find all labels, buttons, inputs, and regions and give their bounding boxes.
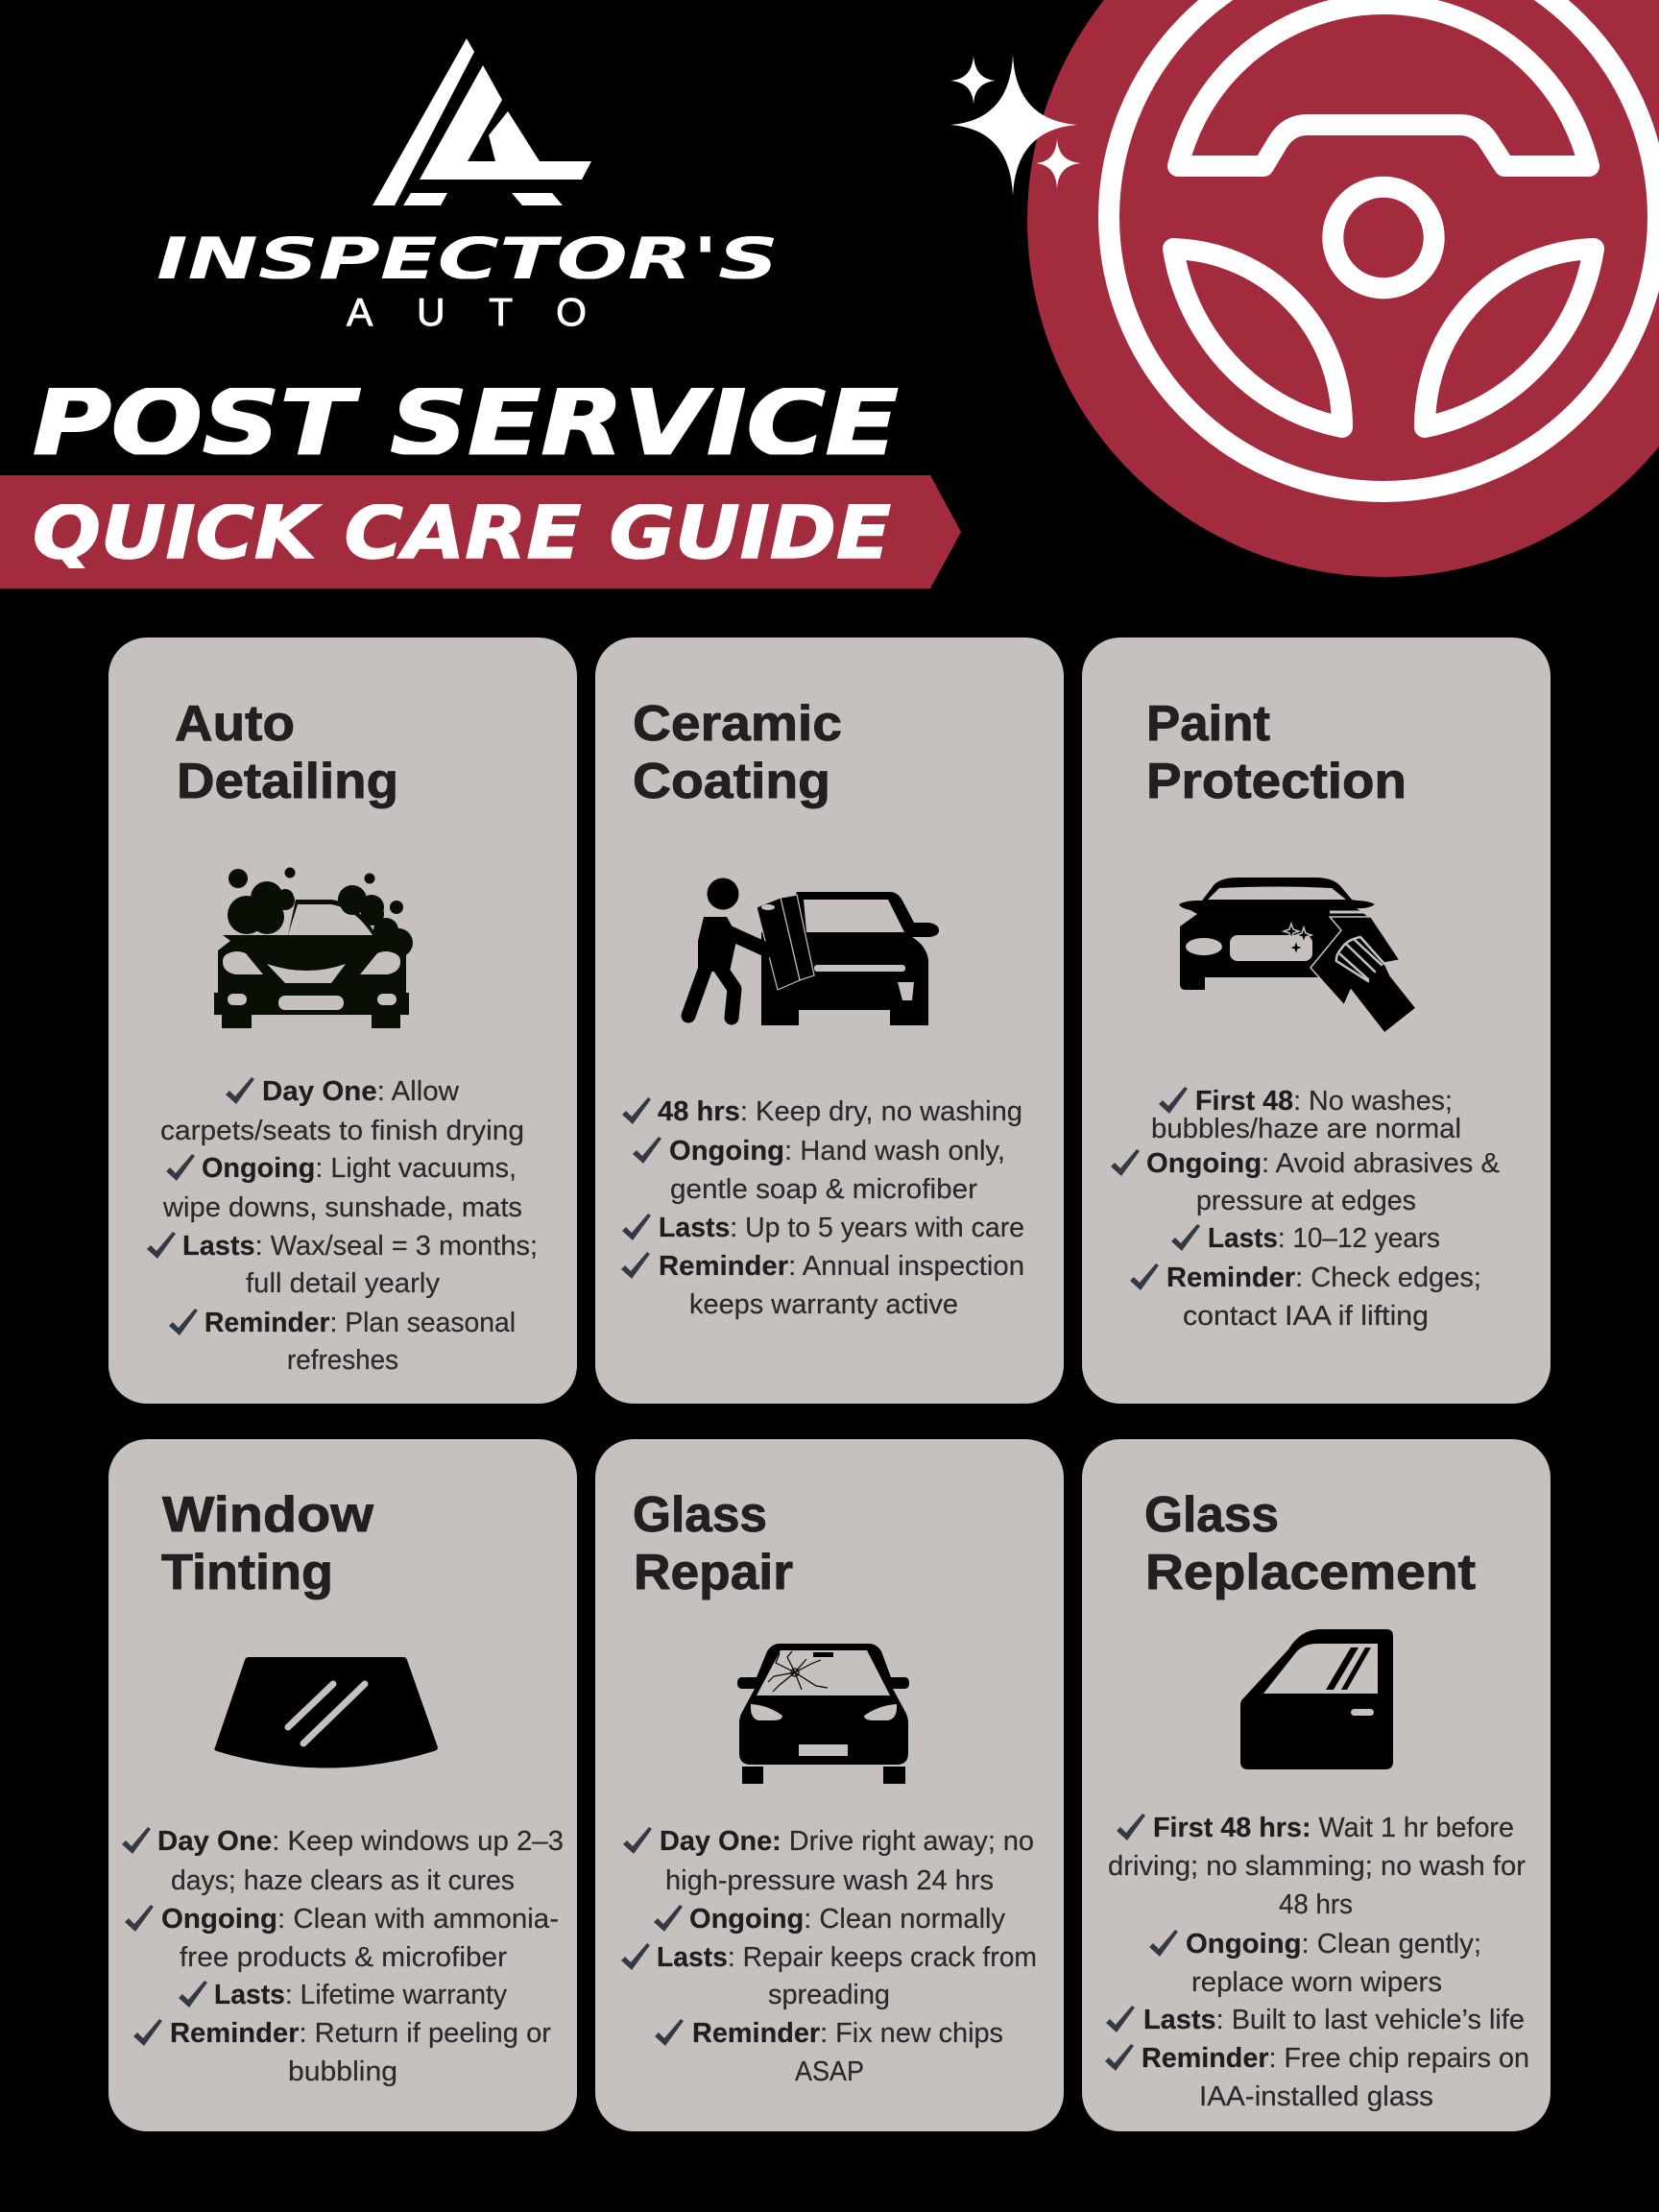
- care list: Lasts: 10–12 years: [1208, 1223, 1440, 1254]
- panel: Glass Replacement: [1082, 1439, 1551, 2131]
- heading: Auto Detailing: [175, 696, 398, 809]
- heading: Window Tinting: Window: [162, 1487, 374, 1543]
- care list: [1105, 1813, 1529, 2112]
- icon: car wash with foam: [214, 868, 413, 1028]
- care list: driving; no slamming; no wash for: [1108, 1851, 1526, 1882]
- heading: Ceramic Coating: Ceramic: [633, 696, 842, 752]
- title: Post Service: POST SERVICE: [33, 371, 899, 476]
- heading: Glass Replacement: Glass: [1144, 1487, 1279, 1543]
- care list: free products & microfiber: [180, 1942, 507, 1973]
- logo mark: [373, 38, 591, 205]
- heading: Ceramic Coating: Coating: [633, 754, 830, 809]
- care list: Ongoing: Clean normally: [689, 1904, 1005, 1935]
- care list: Reminder: Free chip repairs on: [1142, 2043, 1529, 2074]
- care list: Day One: Keep windows up 2–3: [157, 1826, 564, 1857]
- care list: carpets/seats to finish drying: [160, 1116, 524, 1146]
- heading: Window Tinting: [161, 1487, 374, 1600]
- care list: days; haze clears as it cures: [171, 1865, 515, 1896]
- care list: Lasts: Lifetime warranty: [214, 1980, 507, 2010]
- care list: Lasts: Repair keeps crack from: [657, 1942, 1037, 1973]
- icon: car with cracked windshield: [737, 1644, 909, 1784]
- care list: keeps warranty active: [689, 1289, 958, 1320]
- heading: Glass Repair: Repair: [634, 1545, 793, 1600]
- care list: ASAP: [795, 2056, 864, 2087]
- panel: Glass Repair: [595, 1439, 1064, 2131]
- care list: [122, 1826, 564, 2087]
- heading: Glass Repair: [633, 1487, 793, 1600]
- care list: Ongoing: Clean gently;: [1186, 1929, 1481, 1960]
- care list: Reminder: Fix new chips: [692, 2018, 1003, 2049]
- care list: wipe downs, sunshade, mats: [162, 1192, 522, 1223]
- care list: First 48 hrs: Wait 1 hr before: [1153, 1813, 1514, 1843]
- care list: Ongoing: Light vacuums,: [202, 1153, 517, 1184]
- care list: Reminder: Plan seasonal: [204, 1308, 516, 1338]
- heading: Glass Repair: Glass: [633, 1487, 767, 1543]
- panel: Paint Protection: [1082, 637, 1551, 1404]
- care list: contact IAA if lifting: [1183, 1301, 1429, 1332]
- care list: refreshes: [287, 1345, 398, 1376]
- care list: pressure at edges: [1196, 1186, 1416, 1216]
- care list: Ongoing: Hand wash only,: [669, 1136, 1005, 1166]
- care list: Lasts: Up to 5 years with care: [659, 1213, 1024, 1243]
- heading: Glass Replacement: [1144, 1487, 1476, 1600]
- logo wordmark: INSPECTOR'S: [156, 226, 779, 293]
- heading: Paint Protection: Protection: [1146, 754, 1407, 809]
- heading: Auto Detailing: Detailing: [177, 754, 398, 809]
- care list: full detail yearly: [246, 1268, 441, 1299]
- heading: Window Tinting: Tinting: [161, 1545, 333, 1600]
- logo sub-wordmark: AUTO: [347, 290, 587, 334]
- care list: bubbling: [288, 2056, 397, 2087]
- care list: Lasts: Built to last vehicle’s life: [1143, 2005, 1525, 2035]
- care list: IAA-installed glass: [1199, 2081, 1433, 2112]
- panel: Auto Detailing: [108, 637, 577, 1404]
- care list: gentle soap & microfiber: [670, 1174, 977, 1205]
- heading: Paint Protection: Paint: [1146, 696, 1270, 752]
- care list: Ongoing: Avoid abrasives &: [1146, 1148, 1500, 1179]
- care list: Reminder: Annual inspection: [659, 1251, 1024, 1282]
- sparkles: [950, 55, 1081, 196]
- care list: Ongoing: Clean with ammonia-: [161, 1904, 559, 1935]
- heading: Glass Replacement: Replacement: [1145, 1545, 1476, 1600]
- care list: [1111, 1086, 1500, 1332]
- heading: Auto Detailing: Auto: [175, 696, 295, 752]
- care list: high-pressure wash 24 hrs: [665, 1865, 994, 1896]
- banner: Quick Care Guide: QUICK CARE GUIDE: [33, 490, 891, 575]
- care list: [621, 1096, 1024, 1320]
- care list: Lasts: Wax/seal = 3 months;: [182, 1231, 538, 1262]
- panel: Ceramic Coating: [595, 637, 1064, 1404]
- icon: car door: [1240, 1629, 1393, 1769]
- care list: 48 hrs: Keep dry, no washing: [658, 1096, 1022, 1127]
- care list: Reminder: Check edges;: [1166, 1262, 1481, 1293]
- care list: bubbles/haze are normal: [1151, 1114, 1461, 1144]
- red circle with steering wheel icon: [1027, 0, 1659, 577]
- banner: Quick Care Guide: [0, 475, 961, 589]
- care list: First 48: No washes;: [1195, 1086, 1453, 1117]
- care list: 48 hrs: [1279, 1889, 1353, 1920]
- icon: hand polishing car: [1179, 878, 1416, 1033]
- care list: [147, 1076, 538, 1376]
- care list: replace worn wipers: [1191, 1967, 1442, 1998]
- heading: Ceramic Coating: [633, 696, 842, 809]
- care list: spreading: [768, 1980, 890, 2010]
- logo: Inspector's Auto: [156, 38, 779, 334]
- panel: Window Tinting: [108, 1439, 577, 2131]
- heading: Paint Protection: [1146, 696, 1407, 809]
- icon: person applying film to car: [688, 878, 939, 1025]
- care list: [621, 1826, 1037, 2087]
- icon: windshield: [214, 1657, 438, 1768]
- care list: Day One: Allow: [262, 1076, 460, 1107]
- care list: Reminder: Return if peeling or: [170, 2018, 551, 2049]
- care list: Day One: Drive right away; no: [660, 1826, 1034, 1857]
